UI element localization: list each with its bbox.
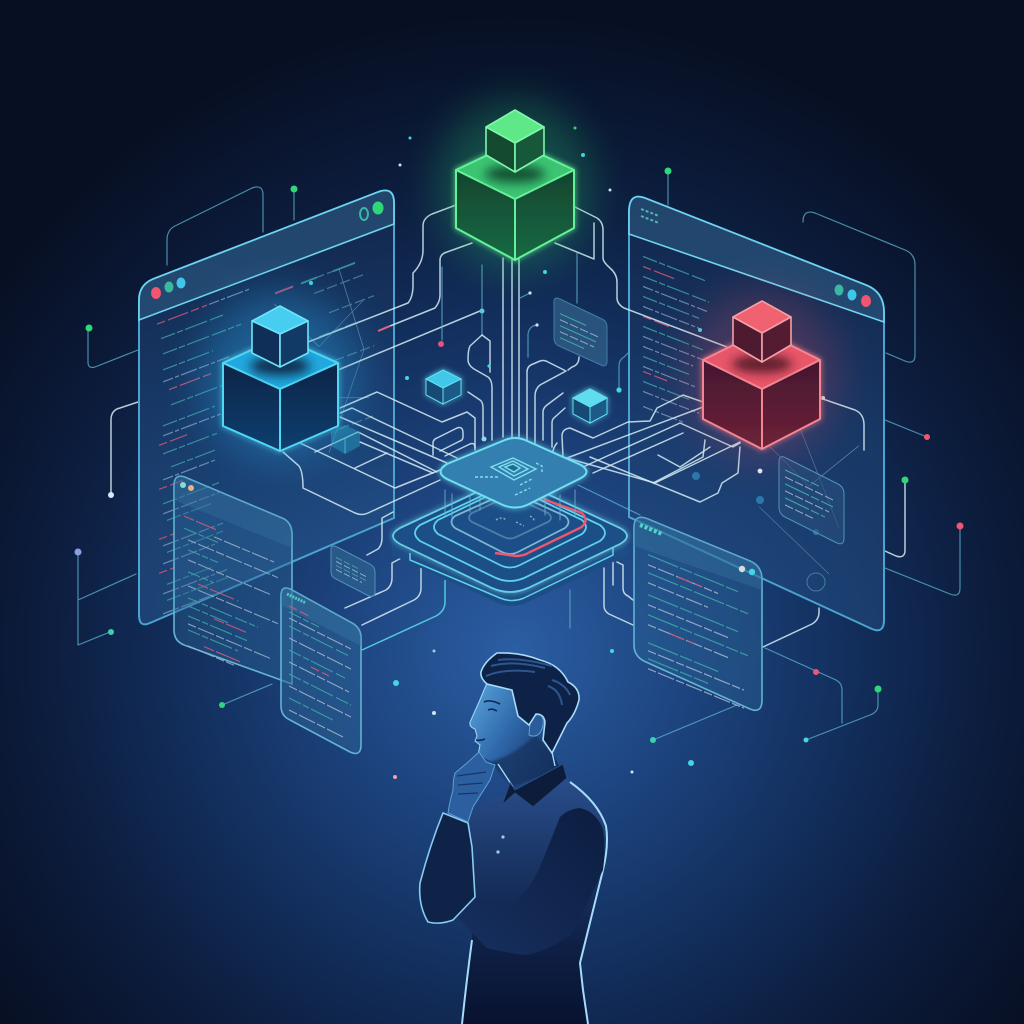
small sheet code lines bbox=[289, 606, 351, 741]
chip top bbox=[440, 438, 586, 508]
hand on chin bbox=[448, 752, 495, 822]
red node bbox=[438, 341, 444, 347]
right window title bar bbox=[629, 197, 884, 322]
lower right code lines bbox=[648, 555, 748, 710]
small cube right bbox=[573, 389, 607, 423]
big blue cube bbox=[223, 337, 338, 451]
left sheet header bbox=[174, 476, 292, 548]
shadow on blue cube bbox=[250, 356, 310, 376]
raised sleeve bbox=[420, 813, 475, 923]
left sheet code lines bbox=[184, 516, 278, 684]
small blue cube bbox=[252, 306, 308, 367]
neck shadow bbox=[490, 735, 558, 787]
small red cube bbox=[733, 301, 791, 362]
wires below platform bbox=[345, 512, 819, 650]
chip emblem under platform bbox=[496, 516, 534, 526]
blue cube glow bbox=[200, 290, 360, 460]
wires from top green cube bbox=[405, 207, 727, 447]
torso bbox=[462, 770, 607, 1024]
chip icon bbox=[475, 458, 542, 495]
right window control dots bbox=[641, 209, 871, 307]
outer connector brackets and dots bbox=[74, 126, 964, 779]
panel: floating note left bbox=[331, 546, 375, 596]
blue cube stack bbox=[200, 290, 360, 460]
green cube stack bbox=[437, 100, 593, 270]
eye and brow bbox=[476, 701, 500, 740]
platform lower rim lines bbox=[410, 548, 613, 600]
face outline bbox=[470, 683, 487, 755]
panel: floating note right bbox=[779, 457, 844, 544]
window control dots bbox=[151, 202, 384, 299]
hair bbox=[481, 653, 579, 753]
panel: small lower code sheet bbox=[281, 588, 361, 753]
panel: left code window bbox=[139, 190, 394, 624]
left window title bar bbox=[139, 190, 394, 320]
left window code lines bbox=[157, 242, 374, 616]
pillars under chip bbox=[445, 490, 575, 525]
finger lines bbox=[457, 772, 486, 794]
torso rim light bbox=[462, 782, 607, 1024]
panel: floating note top centre bbox=[554, 298, 607, 366]
wires from right red cube bbox=[553, 395, 864, 515]
central platform bbox=[392, 438, 628, 606]
panel: lower right code sheet bbox=[634, 517, 762, 710]
person thinking bbox=[420, 653, 607, 1024]
platform rings bbox=[415, 487, 605, 581]
crossed arm bbox=[457, 808, 604, 955]
red cube glow bbox=[684, 290, 840, 460]
platform base bbox=[392, 538, 628, 606]
small sheet header bbox=[281, 588, 361, 646]
small green cube bbox=[486, 110, 544, 172]
big red cube bbox=[703, 331, 820, 449]
buttons bbox=[496, 835, 505, 854]
red cube stack bbox=[684, 290, 840, 460]
shadow on red cube bbox=[732, 355, 792, 373]
right window code lines bbox=[643, 256, 859, 586]
big green cube bbox=[456, 142, 574, 260]
wiring bundle to chip bbox=[283, 205, 864, 650]
ear bbox=[529, 715, 543, 736]
neck and face bbox=[470, 683, 560, 787]
tiny teal cube under blue cube bbox=[331, 425, 360, 454]
collar bbox=[502, 764, 567, 807]
green cube glow bbox=[437, 100, 593, 270]
panel: left lower code sheet bbox=[174, 476, 292, 684]
small cube left bbox=[426, 370, 461, 404]
right sheet header bbox=[634, 517, 762, 590]
shadow on green cube bbox=[485, 165, 545, 183]
panel: right code window bbox=[629, 197, 884, 630]
wires from left blue cube bbox=[283, 205, 480, 514]
hair strands bbox=[486, 659, 570, 705]
neck outline bbox=[498, 752, 555, 787]
